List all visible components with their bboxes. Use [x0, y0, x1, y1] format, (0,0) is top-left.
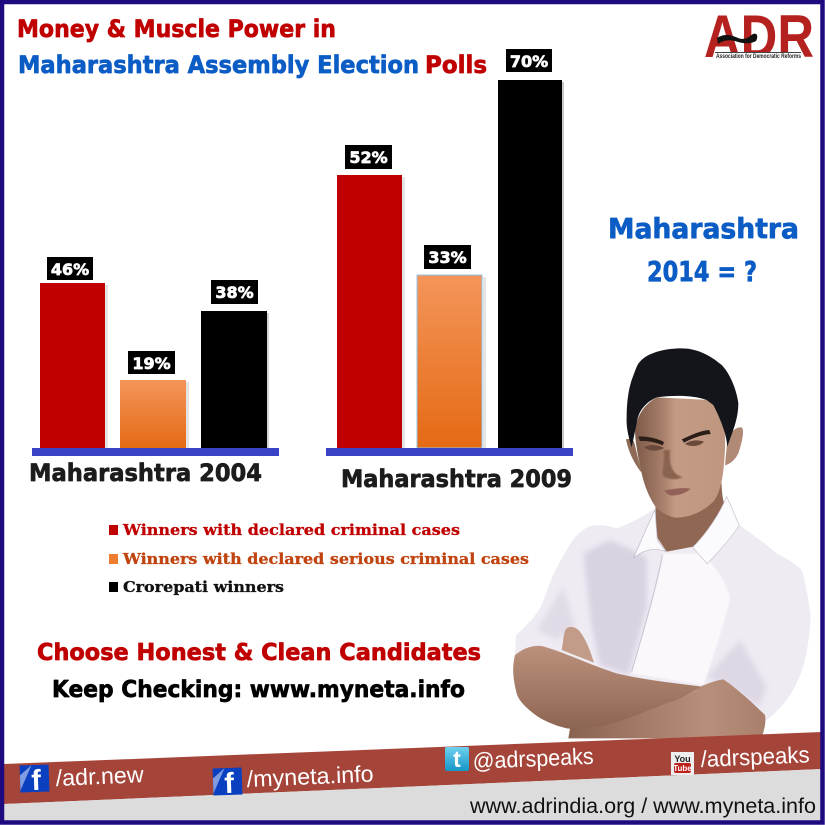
value 70%: 70%	[510, 52, 548, 71]
callout: Maharashtra 2014: Maharashtra	[608, 212, 799, 245]
shirt shading	[537, 540, 767, 707]
link: /adr.new: /adr.new	[55, 761, 145, 791]
value 33%	[424, 245, 471, 269]
icon: facebook: f	[224, 768, 235, 800]
website links: www.adrindia.org / www.myneta.info	[469, 795, 816, 818]
value 38%	[211, 280, 258, 304]
icon: facebook	[20, 765, 50, 798]
call to action: Choose Honest & Clean Candidates	[37, 640, 481, 666]
label 2004: Maharashtra 2004	[29, 459, 262, 487]
title	[17, 15, 487, 79]
bar: criminal cases 2009	[337, 175, 402, 448]
icon: youtube: Tube	[673, 764, 692, 773]
link: /adrspeaks youtube: /adrspeaks	[700, 741, 810, 772]
collar	[633, 510, 666, 558]
value 38%: 38%	[215, 283, 254, 302]
lower forearm	[568, 679, 765, 738]
value 52%	[345, 145, 392, 169]
neck	[655, 483, 730, 553]
hand	[562, 627, 594, 663]
icon: twitter	[445, 746, 469, 772]
upper forearm	[513, 646, 702, 729]
value 19%	[128, 351, 175, 374]
bar: serious criminal cases 2009	[417, 275, 482, 448]
mouth	[664, 488, 691, 496]
footer band	[4, 732, 822, 821]
bar: criminal cases 2004	[40, 283, 105, 448]
title: Money & Muscle Power in	[17, 15, 336, 43]
icon: twitter: t	[453, 746, 461, 772]
value 46%	[47, 257, 93, 280]
title: Polls	[425, 51, 487, 79]
link: /myneta.info: /myneta.info	[246, 760, 374, 792]
chart: Maharashtra 2009	[326, 49, 573, 493]
value 33%: 33%	[428, 248, 467, 267]
axis 2004	[32, 448, 279, 456]
shirt highlight	[632, 553, 730, 685]
hair	[627, 348, 738, 447]
value 52%: 52%	[349, 148, 388, 167]
value 70%	[506, 49, 552, 72]
icon: youtube	[671, 752, 694, 775]
brows	[638, 430, 711, 445]
legend	[109, 521, 529, 596]
face	[635, 397, 725, 518]
callout: Maharashtra 2014	[608, 212, 799, 288]
link: @adrspeaks twitter: @adrspeaks	[472, 743, 594, 774]
call to action	[37, 640, 481, 703]
axis 2009	[326, 448, 573, 456]
legend item: crorepati: Crorepati winners	[123, 578, 284, 596]
value 46%: 46%	[51, 260, 89, 279]
label 2009: Maharashtra 2009	[341, 465, 572, 493]
eyes	[644, 440, 704, 451]
shirt	[515, 496, 811, 720]
call to action: Keep Checking: www.myneta.info	[52, 677, 465, 703]
legend item: criminal cases: Winners with declared criminal cases	[122, 521, 460, 539]
bar: crorepati 2009	[498, 80, 562, 448]
icon: facebook	[213, 768, 243, 801]
chart: Maharashtra 2004	[29, 257, 279, 487]
bar: serious criminal cases 2004	[120, 380, 186, 448]
title: Maharashtra Assembly Election	[18, 51, 419, 79]
nose shadow	[662, 450, 683, 479]
bar: crorepati 2004	[201, 311, 267, 448]
icon: youtube: You	[674, 754, 691, 764]
illustration: man with crossed arms	[513, 348, 811, 738]
callout: Maharashtra 2014: 2014 = ?	[647, 255, 757, 288]
value 19%: 19%	[132, 354, 171, 373]
ears	[626, 439, 642, 473]
icon: facebook: f	[31, 765, 42, 797]
placket line	[632, 555, 662, 672]
legend item: serious criminal cases: Winners with declared serious criminal cases	[122, 550, 529, 568]
